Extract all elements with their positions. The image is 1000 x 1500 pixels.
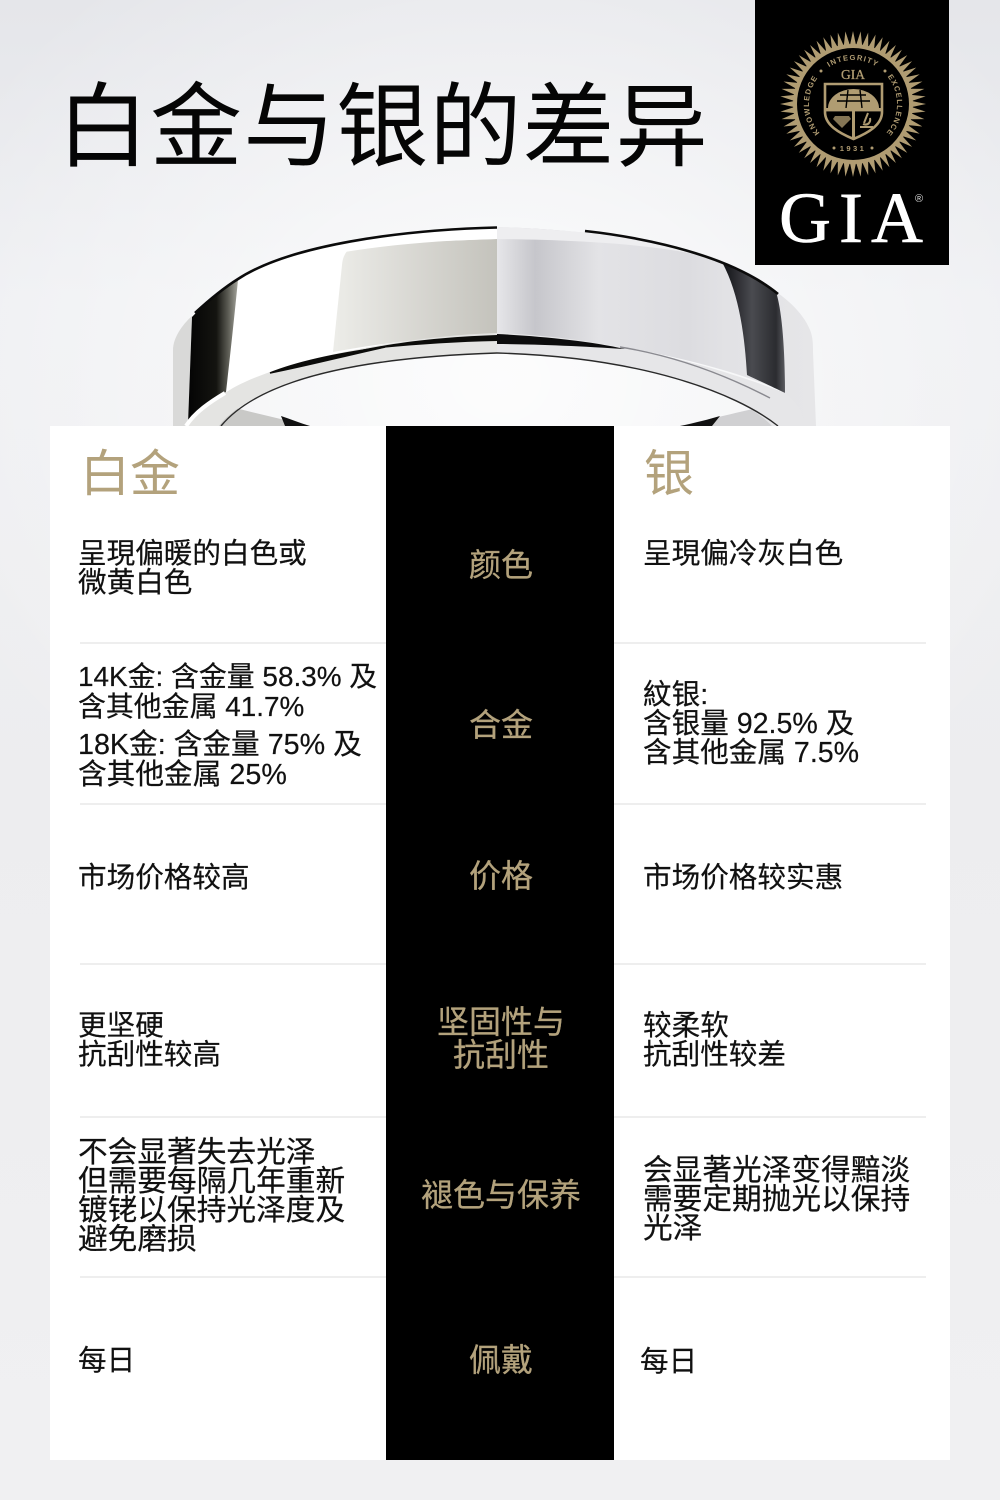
row colour: label: 颜色 [469, 546, 533, 582]
row tarnish: white gold: 镀铑以保持光泽度及 [78, 1194, 345, 1226]
top rim highlight left [238, 227, 497, 280]
row alloy: silver: 紋银: [643, 678, 708, 710]
dark reflection left [188, 280, 238, 424]
row durability: white gold: 抗刮性较高 [78, 1038, 221, 1070]
row tarnish: white gold: 避免磨损 [78, 1222, 197, 1256]
seal: ring text: 1931 [840, 144, 866, 153]
rear ring left [216, 405, 310, 426]
left column heading: 白金 [80, 446, 180, 502]
lower lip right [497, 333, 806, 426]
row alloy: white gold 18K: 含其他金属 25% [78, 758, 287, 790]
row durability: silver: 抗刮性较差 [643, 1038, 786, 1070]
title: 白金与银的差异 [57, 77, 709, 179]
row alloy: white gold 14K: 含其他金属 41.7% [78, 690, 304, 722]
seal: ring text: EXCELLENCE [886, 74, 902, 136]
row price: label: 价格 [469, 858, 533, 894]
row tarnish: silver: 会显著光泽变得黯淡 [643, 1154, 910, 1186]
front face right half [497, 227, 816, 426]
GIA logo panel [755, 0, 949, 265]
lower lip left [186, 333, 497, 426]
row tarnish: label: 褪色与保养 [421, 1176, 581, 1212]
warm grey reflection left [333, 239, 497, 352]
row durability: white gold [78, 1010, 221, 1070]
row colour: silver: 呈現偏冷灰白色 [643, 538, 843, 570]
seal: GIA lettering: GIA [841, 67, 865, 82]
seal: ring text [804, 54, 902, 153]
row tarnish: silver [643, 1154, 910, 1244]
seal: shield [825, 84, 882, 139]
registered mark: ® [915, 193, 923, 205]
row alloy: white gold 18K [78, 728, 362, 790]
row colour: white gold [78, 538, 307, 598]
row tarnish: white gold [78, 1136, 345, 1256]
center category column [386, 426, 614, 1460]
row durability: white gold: 更坚硬 [78, 1010, 164, 1042]
row price: white gold: 市场价格较高 [78, 862, 250, 894]
row colour: white gold: 呈現偏暖的白色或 [78, 538, 307, 570]
row durability: silver [643, 1010, 786, 1070]
GIA wordmark: GIA [779, 178, 931, 258]
row durability: label: 抗刮性 [453, 1036, 549, 1072]
row tarnish: white gold: 不会显著失去光泽 [78, 1136, 316, 1168]
row alloy: silver: 含银量 92.5% 及 [643, 708, 854, 740]
seal: ring text: INTEGRITY [826, 54, 878, 67]
row price: silver: 市场价格较实惠 [643, 862, 843, 894]
row alloy: white gold 18K: 18K金: 含金量 75% 及 [78, 728, 362, 760]
comparison table panel [50, 426, 950, 1460]
row durability: silver: 较柔软 [643, 1010, 729, 1042]
dark facet right [722, 262, 785, 393]
row durability: label: 坚固性与 [437, 1004, 565, 1040]
row alloy: silver: 含其他金属 7.5% [643, 736, 859, 768]
seal: ring text: KNOWLEDGE [804, 76, 820, 136]
row wear: label: 佩戴 [469, 1342, 533, 1378]
row alloy: silver [643, 678, 859, 768]
row tarnish: white gold: 但需要每隔几年重新 [78, 1164, 345, 1198]
row tarnish: silver: 需要定期抛光以保持 [643, 1182, 910, 1216]
rear ring right [680, 405, 778, 426]
row alloy: white gold 14K: 14K金: 含金量 58.3% 及 [78, 660, 377, 692]
row wear: silver: 每日 [640, 1346, 697, 1378]
top rim highlight right [497, 227, 725, 262]
row alloy: white gold 14K [78, 660, 377, 722]
seal: sunburst [771, 22, 935, 186]
hero image: white gold and silver ring [173, 226, 816, 426]
row durability: label [437, 1004, 565, 1072]
row colour: white gold: 微黄白色 [78, 566, 192, 598]
row tarnish: silver: 光泽 [643, 1212, 702, 1244]
right column heading: 银 [644, 446, 694, 502]
side edge left [173, 316, 192, 426]
row alloy: label: 合金 [469, 706, 533, 742]
front face left half [188, 227, 497, 426]
row wear: white gold: 每日 [78, 1344, 135, 1376]
